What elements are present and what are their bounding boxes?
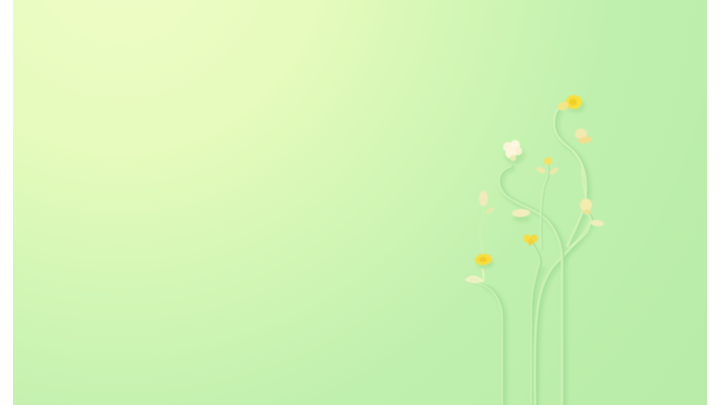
leaf: far right <box>590 219 604 227</box>
stem shadows <box>485 110 593 405</box>
flower: yellow top <box>556 95 585 112</box>
stem: yellow flower <box>554 108 590 248</box>
stem: centre left <box>531 242 540 405</box>
stem: white flower <box>499 166 563 405</box>
stem: far left <box>467 213 503 405</box>
stem: small middle sprig <box>541 164 548 250</box>
leaf: far left pair <box>479 190 495 215</box>
flower: white <box>503 140 525 164</box>
flower: cream right <box>575 128 592 144</box>
sprig: small yellow bud with two leaves <box>536 157 560 176</box>
flower: yellow left <box>474 253 494 268</box>
leaf: cream centre <box>512 209 531 222</box>
flower: yellow cluster centre <box>523 234 538 245</box>
flower: cream lower right <box>580 198 592 214</box>
leaf: lower left white <box>466 269 484 282</box>
stem: centre sweeping right <box>535 213 591 405</box>
